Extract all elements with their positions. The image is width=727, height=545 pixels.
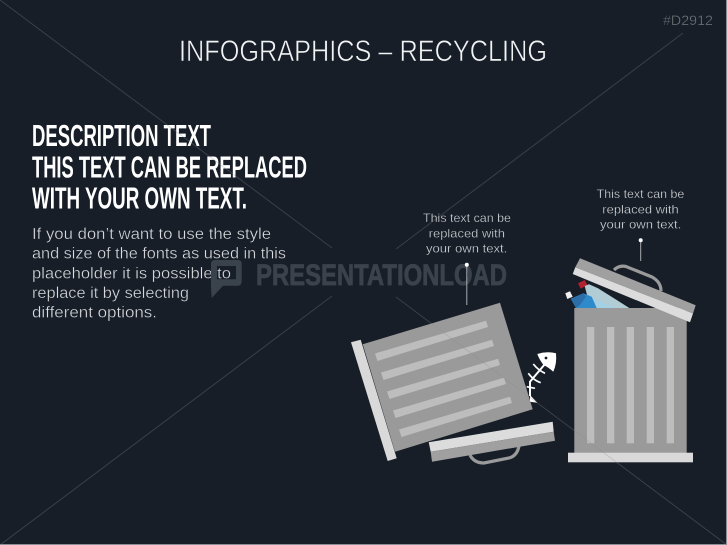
document code: #D2912: [663, 13, 713, 28]
white bottle cap: [565, 291, 573, 299]
description body text: [32, 226, 286, 321]
description body text: replace it by selecting: [32, 285, 189, 302]
description heading: DESCRIPTION TEXT: [32, 118, 211, 153]
callout text: [597, 187, 685, 232]
clear bottle: [585, 284, 629, 308]
callout: right bin: [597, 187, 685, 261]
description body text: placeholder it is possible to: [32, 265, 231, 282]
callout text: This text can be: [597, 187, 685, 201]
callout text: your own text.: [600, 218, 681, 232]
watermark: [211, 259, 507, 298]
callout text: This text can be: [423, 211, 511, 225]
red bottle cap: [578, 280, 587, 289]
callout text: replaced with: [429, 226, 505, 240]
description body text: different options.: [32, 304, 157, 321]
description body text: and size of the fonts as used in this: [32, 246, 286, 263]
description heading: WITH YOUR OWN TEXT.: [32, 180, 247, 215]
blue bottle: [571, 293, 597, 308]
watermark wordmark: PRESENTATIONLOAD: [256, 259, 507, 292]
raised lid: [573, 258, 696, 322]
title: INFOGRAPHICS – RECYCLING: [179, 35, 547, 68]
description heading: THIS TEXT CAN BE REPLACED: [32, 149, 307, 184]
description body text: If you don’t want to use the style: [32, 226, 271, 243]
lid top: [429, 422, 554, 452]
lid side: [431, 432, 555, 462]
lid top: [575, 258, 696, 314]
upright bin: [568, 308, 693, 462]
description heading: [32, 118, 307, 215]
bottles in bin: [565, 280, 629, 308]
lid side: [573, 267, 693, 322]
callout text: your own text.: [426, 242, 507, 256]
bin rim: [351, 340, 397, 461]
callout text: [423, 211, 511, 256]
fallen lid: [429, 422, 555, 463]
bin ribs: [587, 327, 674, 443]
callout: left bin: [423, 211, 511, 305]
bin ribs: [375, 321, 512, 437]
bin base: [568, 453, 693, 462]
bin body: [574, 308, 687, 453]
lid handle: [470, 446, 519, 463]
icon: fish skeleton: [527, 352, 556, 403]
watermark speech bubble: [211, 260, 242, 298]
bin body: [363, 303, 533, 452]
tipped over bin: [351, 303, 533, 461]
callout pin: [465, 263, 469, 305]
callout text: replaced with: [602, 202, 679, 216]
callout pin: [639, 238, 643, 261]
lid handle: [614, 266, 661, 291]
